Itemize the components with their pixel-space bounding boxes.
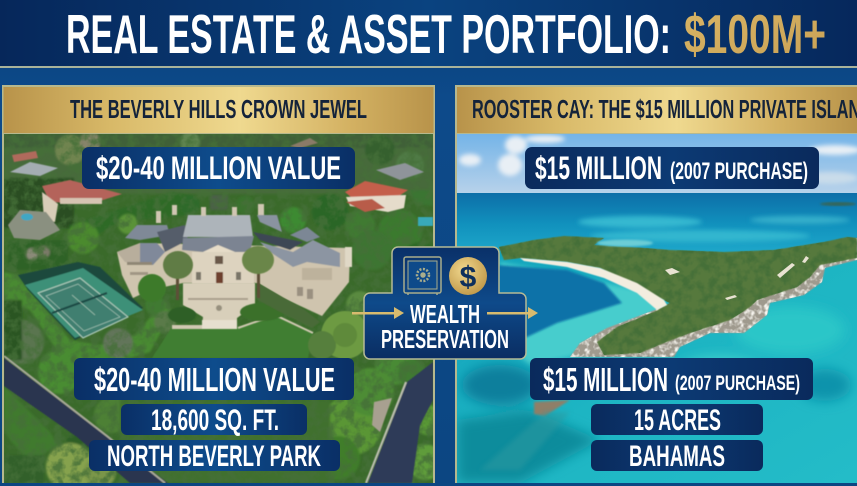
background neighbourhood — [4, 132, 433, 228]
tennis court — [18, 262, 143, 340]
neighbouring houses — [8, 138, 424, 240]
gold header: Rooster Cay — [457, 87, 857, 133]
pill: square footage: 18,600 SQ. FT. — [151, 404, 279, 437]
badge: wealth preservation — [364, 247, 526, 359]
shallows by the bay — [500, 262, 670, 365]
mansion — [117, 204, 352, 316]
sky — [457, 134, 857, 194]
pill: Beverly Hills value, top: $20-40 MILLION VALUE — [96, 150, 341, 186]
pill: Rooster Cay price, top — [525, 147, 819, 189]
pill: acreage — [591, 404, 763, 437]
lower foliage — [4, 291, 443, 486]
pill: Beverly Hills value, top — [82, 147, 355, 189]
icon: safe — [404, 257, 441, 295]
sea — [457, 193, 857, 255]
shrubs by terrace — [168, 283, 320, 328]
north inlet shallows — [597, 240, 653, 246]
icon: dollar coin: $ — [460, 261, 477, 294]
island vegetation — [495, 232, 857, 360]
pool at right — [418, 217, 433, 226]
aerial photo: private island — [457, 134, 857, 483]
deep water patches — [495, 265, 622, 345]
hedges and trees — [8, 190, 432, 270]
roads — [4, 356, 433, 483]
lagoon water — [457, 252, 857, 483]
aerial photo: mansion estate — [0, 132, 443, 486]
gold header: Beverly Hills — [4, 87, 434, 133]
arrow: right — [487, 307, 538, 319]
sand spit — [534, 400, 570, 416]
pill: location — [89, 440, 340, 473]
rock texture — [565, 235, 857, 360]
beach — [520, 258, 667, 310]
badge text — [381, 299, 509, 354]
clouds — [459, 135, 857, 184]
badge text: PRESERVATION — [381, 324, 509, 354]
pill: Rooster Cay price, lower: (2007 PURCHASE) — [675, 372, 800, 395]
lawn — [152, 315, 313, 358]
pill: country: BAHAMAS — [629, 440, 725, 473]
terrace and stairs — [172, 283, 313, 333]
sand tracks — [665, 256, 809, 300]
arrow: left — [352, 307, 404, 319]
vegetation texture — [495, 232, 857, 360]
title band — [0, 0, 857, 68]
foliage texture — [4, 134, 433, 483]
far island — [820, 202, 856, 206]
panel: Beverly Hills — [0, 85, 443, 486]
palm trees — [138, 246, 369, 359]
badge text: WEALTH — [410, 299, 480, 329]
hedge around court — [0, 272, 176, 394]
pill: acreage: 15 ACRES — [634, 404, 721, 437]
pill: Beverly Hills value, lower — [74, 358, 354, 400]
pill: Rooster Cay price, lower: $15 MILLION — [543, 361, 668, 398]
pill: square footage — [121, 404, 307, 437]
pill: Rooster Cay price, top: $15 MILLION — [535, 150, 662, 186]
pill: Beverly Hills value, lower: $20-40 MILLION VALUE — [94, 361, 335, 398]
shallow water streaks — [578, 216, 850, 242]
gold header: Beverly Hills: THE BEVERLY HILLS CROWN JEWEL — [70, 94, 367, 124]
rocky shore — [565, 235, 857, 360]
panel: Rooster Cay — [455, 85, 857, 483]
pill: location: NORTH BEVERLY PARK — [107, 440, 321, 473]
icon: dollar coin — [449, 257, 487, 295]
pill: Rooster Cay price, lower — [530, 358, 813, 400]
